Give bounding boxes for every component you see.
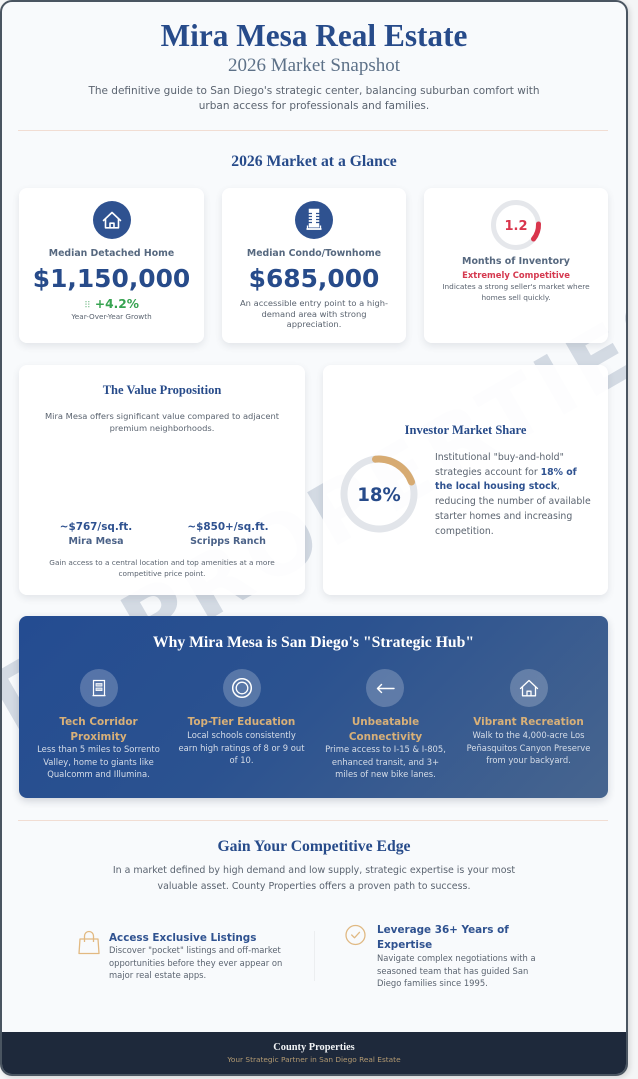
- feature text: [37, 744, 160, 779]
- label: Scripps Ranch: Scripps Ranch: [190, 536, 266, 547]
- feature title: [59, 716, 138, 743]
- benefit text: [377, 953, 536, 988]
- benefit title: [377, 924, 509, 951]
- competitive edge text: In a market defined by high demand and low supply, strategic expertise is your most: [113, 865, 515, 876]
- figure: Mira Mesa: ~$767/sq.ft.: [60, 521, 132, 533]
- icon: condo building: [295, 201, 333, 239]
- panel: strategic hub: [19, 616, 608, 798]
- growth figure: ⠿ +4.2%: [84, 297, 139, 311]
- intro text: urban access for professionals and families.: [199, 100, 429, 112]
- panel: median detached home: [19, 188, 204, 343]
- caption: Gain access to a central location and top amenities at a more: [49, 558, 275, 567]
- description: competition.: [435, 526, 494, 537]
- description: [435, 452, 591, 537]
- feature text: miles of new bike lanes.: [335, 769, 436, 779]
- subtitle: 2026 Market Snapshot: [228, 55, 400, 76]
- benefit text: seasoned team that has guided San: [377, 966, 528, 976]
- feature title: [349, 716, 422, 743]
- icon: house: [93, 201, 131, 239]
- gauge: 1.2 months: [491, 200, 541, 250]
- icon: rings: [223, 669, 261, 707]
- description: [442, 282, 590, 302]
- icon: shopping bag: [78, 930, 100, 954]
- caption: competitive price point.: [118, 569, 206, 578]
- donut chart: 18%: [340, 456, 418, 532]
- description: reducing the number of available: [435, 496, 591, 507]
- section heading: market at a glance: 2026 Market at a Glance: [231, 153, 397, 170]
- description: [240, 298, 388, 329]
- status: Extremely Competitive: [462, 270, 570, 280]
- title: Mira Mesa Real Estate: [161, 18, 467, 53]
- feature text: Less than 5 miles to Sorrento: [37, 744, 160, 754]
- benefit text: Navigate complex negotiations with a: [377, 953, 536, 963]
- footer tagline: Your Strategic Partner in San Diego Real Estate: [227, 1055, 401, 1064]
- footer: [0, 1032, 628, 1076]
- description: Mira Mesa offers significant value compared to adjacent: [45, 411, 279, 421]
- panel: months of inventory: [424, 188, 608, 343]
- heading: Investor Market Share: [405, 423, 526, 437]
- feature title: Vibrant Recreation: [473, 716, 584, 728]
- description: [45, 411, 279, 433]
- icon: arrow: [366, 669, 404, 707]
- label: Mira Mesa: Mira Mesa: [68, 536, 124, 547]
- benefit text: opportunities before they ever appear on: [109, 958, 282, 968]
- price: $1,150,000: [33, 264, 190, 293]
- intro text: The definitive guide to San Diego's strategic center, balancing suburban comfort with: [88, 85, 540, 97]
- benefit text: Diego families since 1995.: [377, 978, 488, 988]
- feature: education: [179, 669, 304, 765]
- benefit title: Access Exclusive Listings: [109, 932, 256, 944]
- feature text: from your backyard.: [486, 755, 571, 765]
- feature text: enhanced transit, and 3+: [332, 757, 439, 767]
- panel: value proposition: [19, 365, 305, 595]
- footer brand: County Properties: [273, 1042, 355, 1053]
- feature text: Walk to the 4,000-acre Los: [472, 730, 584, 740]
- label: Median Detached Home: [49, 248, 174, 259]
- feature: tech corridor: [37, 669, 160, 779]
- benefit text: [109, 945, 282, 980]
- figure: Scripps Ranch: ~$850+/sq.ft.: [187, 521, 269, 533]
- feature text: earn high ratings of 8 or 9 out: [179, 743, 304, 753]
- description: An accessible entry point to a high-: [240, 298, 388, 308]
- feature: recreation: [467, 669, 590, 765]
- description: demand area with strong: [261, 309, 367, 319]
- donut chart: 18%: 18%: [357, 485, 401, 506]
- feature text: of 10.: [229, 755, 254, 765]
- panel: investor market share: [323, 365, 608, 595]
- feature text: [467, 730, 590, 765]
- heading: Why Mira Mesa is San Diego's "Strategic Hub": [153, 634, 474, 651]
- feature: connectivity: [325, 669, 446, 779]
- description: Institutional "buy-and-hold": [435, 452, 564, 463]
- feature title: Unbeatable: [352, 716, 419, 728]
- feature text: Peñasquitos Canyon Preserve: [467, 743, 590, 753]
- description: Indicates a strong seller's market where: [442, 282, 590, 291]
- competitive edge text: valuable asset. County Properties offers a proven path to success.: [158, 880, 470, 892]
- icon: house: [510, 669, 548, 707]
- icon: office building: [80, 669, 118, 707]
- feature text: Prime access to I-15 & I-805,: [325, 744, 446, 754]
- feature text: Local schools consistently: [187, 730, 296, 740]
- feature title: Connectivity: [349, 731, 422, 743]
- label: Median Condo/Townhome: [247, 248, 381, 259]
- feature text: [325, 744, 446, 779]
- label: Months of Inventory: [462, 256, 570, 267]
- benefit: exclusive listings: [78, 930, 282, 980]
- feature title: Proximity: [70, 731, 127, 743]
- growth caption: Year-Over-Year Growth: [71, 312, 152, 321]
- benefit title: Expertise: [377, 939, 432, 951]
- benefit text: major real estate apps.: [109, 970, 206, 980]
- heading: competitive edge: Gain Your Competitive Edge: [217, 838, 411, 855]
- feature title: Tech Corridor: [59, 716, 138, 728]
- gauge: 1.2 months: 1.2: [504, 219, 528, 234]
- description: the local housing stock,: [435, 481, 560, 492]
- panel: median condo: [222, 188, 406, 343]
- feature title: Top-Tier Education: [188, 716, 295, 728]
- price: $685,000: [249, 264, 379, 293]
- description: appreciation.: [287, 319, 341, 329]
- benefit title: Leverage 36+ Years of: [377, 924, 509, 936]
- feature text: Valley, home to giants like: [43, 757, 154, 767]
- feature text: Qualcomm and Illumina.: [47, 769, 150, 779]
- competitive edge text: [113, 865, 515, 892]
- description: premium neighborhoods.: [110, 423, 214, 433]
- benefit text: Discover "pocket" listings and off-market: [109, 945, 281, 955]
- description: homes sell quickly.: [481, 293, 551, 302]
- caption: [49, 558, 275, 578]
- icon: check circle: [345, 924, 366, 946]
- feature text: [179, 730, 304, 765]
- benefit: years of expertise: [345, 924, 536, 988]
- description: starter homes and increasing: [435, 511, 572, 522]
- intro text: [88, 85, 540, 112]
- heading: The Value Proposition: [103, 383, 221, 397]
- description: strategies account for 18% of: [435, 467, 577, 478]
